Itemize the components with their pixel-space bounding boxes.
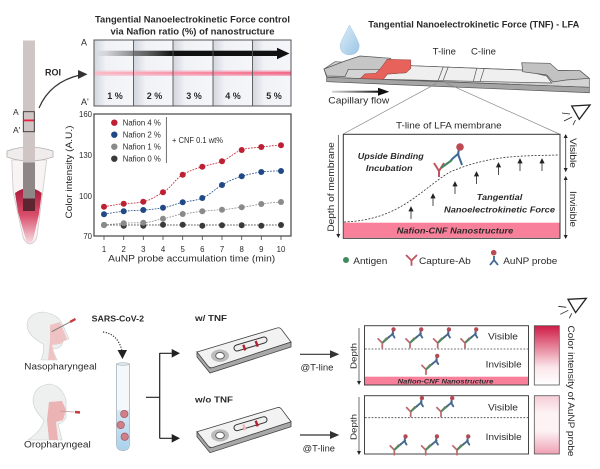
capillary flow arrow [332, 88, 389, 96]
chart legend: + CNF 0.1 wt% [172, 136, 223, 145]
percent labels [107, 91, 282, 101]
visible label: Visible [488, 331, 518, 341]
gradient arrow [96, 48, 290, 59]
ROI arrow [39, 70, 88, 108]
chart legend [111, 117, 223, 164]
tube body [12, 160, 47, 244]
percent labels: 4 % [225, 91, 241, 101]
y tick labels: 100 [79, 192, 93, 201]
panel: T-line membrane [343, 134, 560, 238]
@T-line upper label: @T-line [300, 363, 334, 373]
layer label: Nafion-CNF Nanostructure [397, 226, 514, 236]
w/ TNF label: w/ TNF [194, 313, 227, 323]
Upside Binding label [358, 151, 425, 173]
strip side [327, 77, 589, 93]
T-line of LFA membrane label: T-line of LFA membrane [396, 120, 502, 130]
depth axis upper [348, 328, 361, 385]
nasopharyngeal head [27, 312, 76, 360]
depth of membrane axis [326, 135, 340, 238]
Nafion label: Nafion-CNF Nanostructure [398, 378, 494, 385]
depth of membrane axis: Depth of membrane [326, 142, 336, 232]
invisible axis: Invisible [568, 191, 578, 227]
branching arrows [146, 349, 180, 443]
x tick labels: 4 [161, 245, 166, 254]
capillary flow label: Capillary flow [328, 95, 390, 105]
force arrows [409, 159, 544, 219]
ROI box [23, 112, 34, 132]
x tick labels: 3 [141, 245, 145, 254]
pink test line [94, 70, 291, 76]
Tangential force label: Nanoelectrokinetic Force [444, 204, 555, 214]
dashed curve [344, 155, 559, 222]
Oropharyngeal label: Oropharyngeal [24, 440, 91, 450]
y tick labels: 70 [83, 232, 93, 241]
absorbent pad right [522, 63, 589, 82]
heading: Nafion control [95, 15, 290, 36]
icon: eye bottom [558, 298, 586, 318]
conjugate pad red [361, 59, 411, 79]
y tick labels [79, 110, 93, 241]
visible label: Visible [488, 403, 518, 413]
swab [52, 319, 76, 332]
antibody complexes [378, 327, 478, 374]
label A': A' [13, 125, 21, 135]
series: Nafion 4 [101, 142, 284, 210]
ROI label: ROI [45, 68, 61, 78]
x tick labels: 6 [200, 245, 204, 254]
swab [60, 411, 80, 412]
panel: with TNF result [364, 326, 528, 385]
Nasopharyngeal label: Nasopharyngeal [24, 361, 97, 371]
color bar lower [534, 396, 559, 454]
chart legend: Nafion 0 % [123, 154, 161, 164]
strip body [324, 62, 589, 87]
chart legend: Nafion 2 % [123, 130, 161, 140]
legend: antigen / capture-ab / AuNP: AuNP probe [503, 256, 557, 266]
tube rim [7, 147, 53, 161]
color intensity vertical label: Color intensity of AuNP probe [566, 326, 576, 456]
axis ticks [104, 236, 281, 240]
legend: antigen / capture-ab / AuNP: Antigen [353, 256, 387, 266]
heading: Nafion control: via Nafion ratio (%) of nanostructure [110, 26, 274, 36]
arrow to T-line upper [300, 350, 339, 358]
x axis title: AuNP probe accumulation time (min) [108, 254, 275, 264]
x tick labels: 9 [259, 245, 263, 254]
zoom lines [343, 83, 559, 134]
visible axis [564, 134, 578, 172]
heading: Nafion control: Tangential Nanoelectrokinetic Force control [95, 15, 290, 25]
percent labels: 5 % [266, 91, 282, 101]
labels A and A' on image: A [81, 38, 87, 48]
T-line label: T-line [433, 46, 456, 56]
invisible label: Invisible [486, 432, 522, 442]
labels A and A' on image: A' [81, 97, 89, 107]
Nafion layer [365, 377, 528, 384]
color bar upper [534, 326, 559, 385]
legend: antigen / capture-ab / AuNP [343, 250, 557, 266]
percent labels: 3 % [186, 91, 202, 101]
test lines [243, 341, 258, 350]
x tick labels: 7 [220, 245, 224, 254]
@T-line lower label: @T-line [303, 443, 335, 453]
x tick labels: 10 [277, 245, 286, 254]
arrow to T-line lower [300, 431, 339, 439]
membrane [383, 66, 552, 83]
test tube with virus [116, 363, 130, 450]
icon: water drop [340, 25, 359, 55]
tube liquid [15, 188, 42, 244]
w/o TNF label: w/o TNF [194, 395, 233, 405]
legend: antigen / capture-ab / AuNP: Capture-Ab [419, 256, 471, 266]
x tick labels [102, 245, 286, 254]
percent labels: 2 % [147, 91, 162, 101]
y tick labels: 160 [79, 110, 93, 119]
x tick labels: 1 [102, 245, 106, 254]
chart legend: Nafion 4 % [123, 118, 161, 128]
Upside Binding label: Incubation [366, 163, 413, 173]
Nafion-CNF layer [344, 223, 560, 238]
Tangential force label [444, 192, 555, 214]
series: Nafion 0 [101, 222, 284, 229]
LFA strip illustration [324, 56, 589, 93]
icon: eye top [562, 105, 590, 125]
panel: ROI strip images [94, 40, 291, 106]
Upside Binding label: Upside Binding [358, 151, 425, 161]
left panel: tube with test strip [7, 40, 53, 244]
antibody complex [434, 143, 464, 177]
test strip [23, 40, 35, 162]
chart legend: Nafion 1 % [123, 142, 161, 152]
series: Nafion 1 [101, 199, 284, 228]
y axis title: Color intensity (A.U.) [64, 126, 75, 218]
x tick labels: 2 [122, 245, 126, 254]
strip red line [24, 120, 34, 121]
x tick labels: 5 [181, 245, 186, 254]
depth axis lower [348, 397, 361, 455]
x tick labels: 8 [240, 245, 244, 254]
invisible label: Invisible [486, 359, 522, 369]
panel: without TNF result [364, 396, 528, 455]
cassette with TNF [197, 328, 291, 373]
depth axis upper: Depth [348, 343, 358, 369]
heading: TNF-LFA: Tangential Nanoelectrokinetic Force (TNF) - LFA [368, 19, 580, 29]
sample pad left [324, 56, 391, 76]
SARS-CoV-2 label: SARS-CoV-2 [92, 314, 144, 324]
label A: A [13, 107, 19, 117]
labels A and A' on image [81, 38, 89, 107]
series: Nafion 2 [101, 168, 284, 217]
C-line label: C-line [471, 46, 496, 56]
test lines [243, 424, 245, 430]
line chart: color intensity [64, 110, 291, 264]
cassette without TNF [197, 407, 291, 453]
Tangential force label: Tangential [477, 192, 523, 202]
depth axis lower: Depth [348, 414, 358, 440]
invisible axis [564, 176, 578, 239]
percent labels: 1 % [107, 91, 123, 101]
antibody complexes [390, 396, 470, 455]
dotted arrow to tube [103, 332, 127, 359]
y tick labels: 130 [79, 151, 93, 160]
oropharyngeal head [28, 384, 80, 440]
test lines [438, 67, 484, 82]
visible axis: Visible [568, 138, 578, 168]
